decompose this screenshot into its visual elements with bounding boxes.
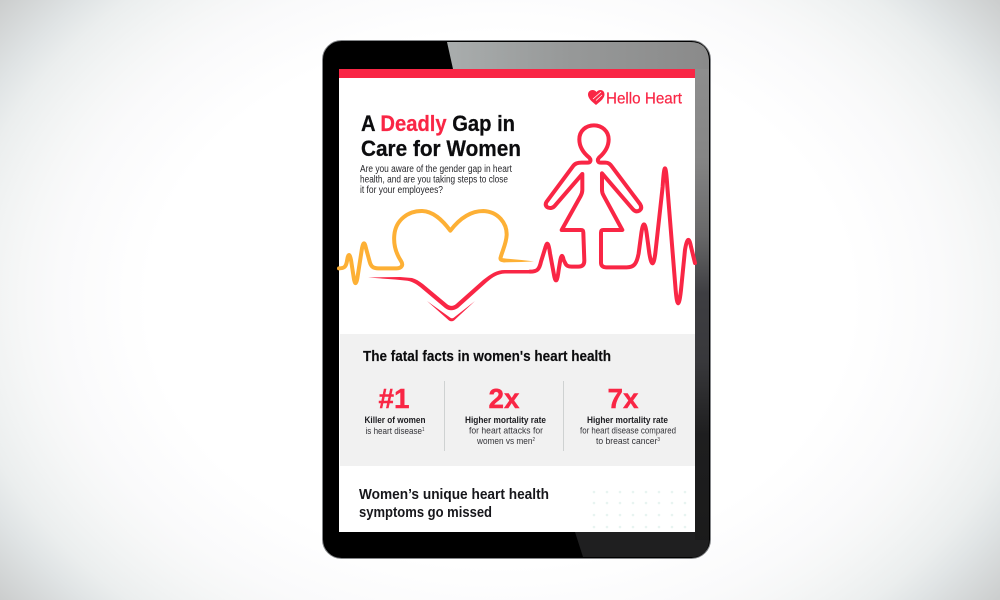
logo wordmark: Hello Heart	[606, 90, 683, 108]
facts heading: The fatal facts in women's heart health	[363, 348, 611, 365]
fact: 7x: Higher mortality rate	[587, 415, 668, 425]
symptoms heading	[359, 487, 549, 521]
intro text	[360, 164, 512, 196]
fact: 7x: 7x	[608, 383, 639, 414]
fact: #1	[364, 383, 426, 436]
divider	[444, 381, 445, 451]
title: Care for Women	[361, 136, 521, 161]
intro text: it for your employees?	[360, 185, 443, 196]
fact: #1: 1	[422, 427, 425, 433]
fact: 2x: Higher mortality rate	[465, 415, 546, 425]
divider	[563, 381, 564, 451]
symptoms heading: Women’s unique heart health	[359, 487, 549, 503]
logo: Hello Heart	[588, 90, 683, 108]
fact: 2x	[465, 383, 546, 446]
orange heart ECG line	[339, 211, 534, 283]
red ECG line under heart	[368, 270, 532, 321]
tablet device	[322, 40, 710, 558]
fact: #1: Killer of women	[364, 415, 426, 425]
fact: 2x: for heart attacks for	[469, 426, 543, 436]
fact: 2x: 2	[532, 437, 535, 443]
fact: #1: #1	[378, 383, 410, 414]
intro text: health, and are you taking steps to close	[360, 174, 508, 186]
fact: 2x: 2x	[488, 383, 520, 414]
fact: 7x: 3	[657, 437, 660, 443]
red ECG line with woman figure	[530, 125, 695, 303]
fact: 7x: to breast cancer	[596, 436, 661, 446]
top red bar	[339, 69, 695, 78]
fact: 2x: women vs men	[477, 436, 538, 446]
panel: fatal facts	[340, 334, 695, 466]
fact: #1: is heart disease	[366, 426, 429, 436]
intro text: Are you aware of the gender gap in heart	[360, 164, 512, 175]
icon: logo heart	[588, 90, 604, 105]
decorative dot pattern	[593, 491, 686, 528]
symptoms heading: symptoms go missed	[359, 505, 492, 521]
heart bottom tip	[427, 301, 475, 321]
fact: 7x: for heart disease compared	[580, 426, 676, 436]
fact: 7x	[580, 383, 676, 446]
title	[361, 111, 521, 161]
title: A Deadly Gap in	[361, 111, 515, 136]
